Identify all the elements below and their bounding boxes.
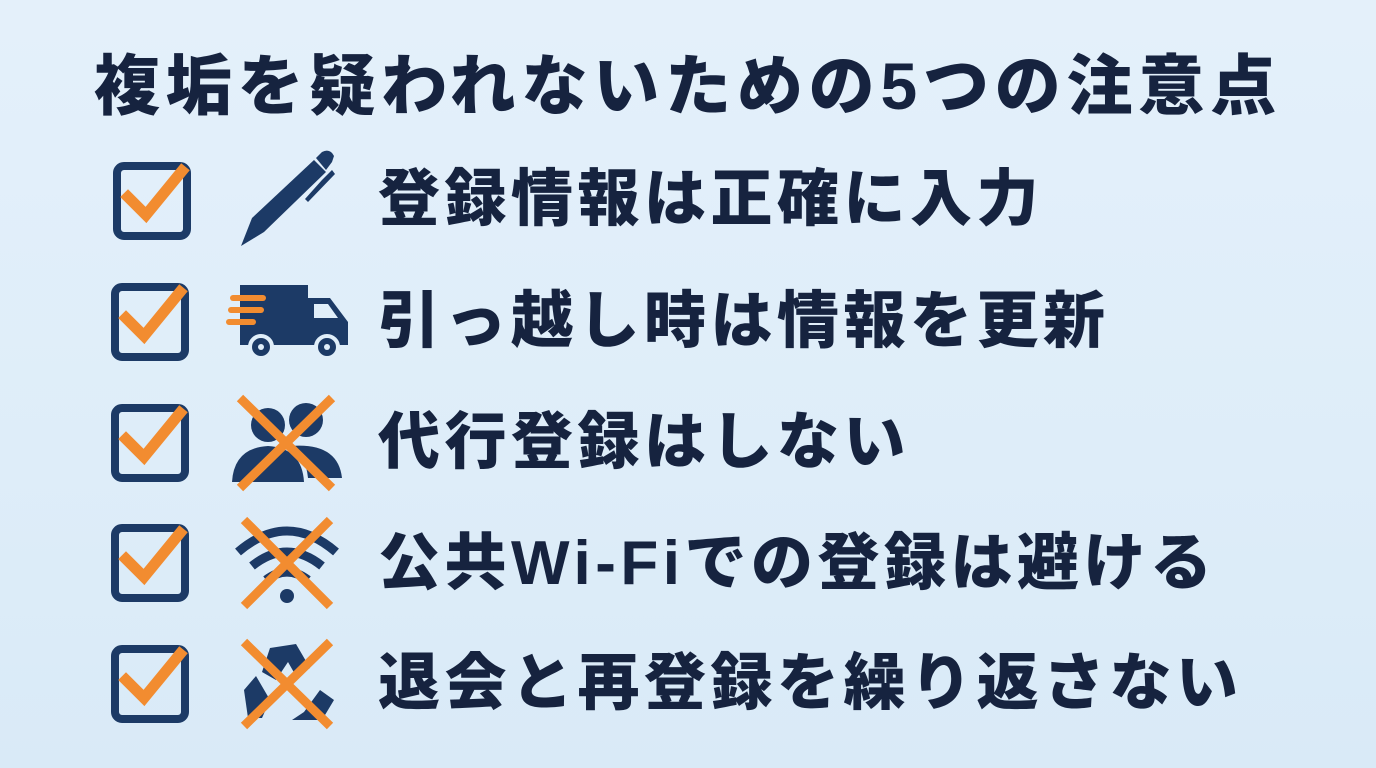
icon: pen [241,151,335,246]
icon: truck [226,285,348,358]
checkbox 3 [115,408,185,478]
icon: users crossed [232,398,342,488]
checkbox 4 [115,528,185,598]
checkbox 1 [117,166,187,236]
checkbox 5 [115,649,185,719]
item text 4: 公共Wi-Fiでの登録は避ける [378,529,1216,598]
icon: recycle crossed [244,642,334,726]
item text 5: 退会と再登録を繰り返さない [378,649,1243,718]
item text 3: 代行登録はしない [378,408,910,477]
checkbox 2 [115,287,185,357]
item text 1: 登録情報は正確に入力 [378,165,1043,234]
title: 複垢を疑われないための5つの注意点 [94,49,1282,123]
item text 2: 引っ越し時は情報を更新 [378,287,1110,356]
icon: wifi crossed [238,520,336,606]
